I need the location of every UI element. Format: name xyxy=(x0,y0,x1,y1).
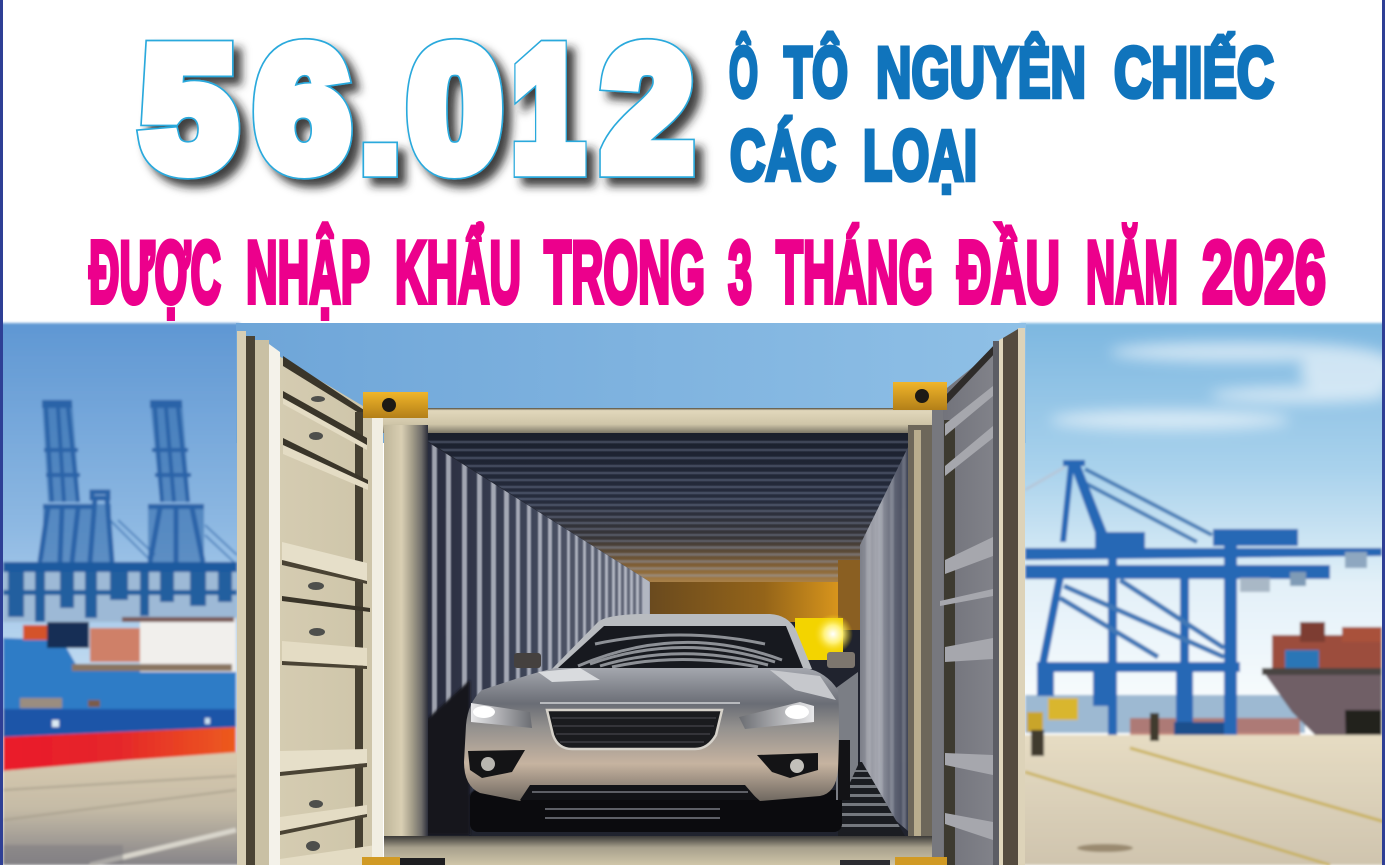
panel: container interior xyxy=(428,433,908,836)
heading: car type: TÔ xyxy=(784,33,848,113)
heading: imported in first 3 months of 2026: NHẬP xyxy=(246,222,370,322)
panel: left port background xyxy=(0,323,240,865)
light glow xyxy=(795,618,843,660)
heading: big number 56.012: 2 xyxy=(603,14,692,205)
icon: car xyxy=(464,614,858,832)
heading: imported in first 3 months of 2026: TRONG xyxy=(544,222,705,322)
right wall xyxy=(860,448,908,831)
heading: car type: CÁC xyxy=(730,117,836,196)
shadow left of car xyxy=(426,680,470,835)
sky between doors xyxy=(236,323,1026,443)
heading: big number 56.012: . xyxy=(365,69,396,192)
heading: imported in first 3 months of 2026: ĐẦU xyxy=(957,222,1060,322)
heading: big number 56.012: 2 xyxy=(603,14,692,205)
photo scene: container port xyxy=(0,323,1385,865)
heading: car type: NGUYÊN xyxy=(876,33,1086,113)
heading: car type xyxy=(729,33,1274,196)
heading: imported in first 3 months of 2026: ĐƯỢC xyxy=(89,222,221,322)
icon: dock worker xyxy=(1027,698,1159,756)
heading: big number 56.012 xyxy=(142,12,692,205)
heading: car type: CHIẾC xyxy=(1114,34,1274,113)
icon: corner castings xyxy=(362,382,947,865)
right ground xyxy=(1020,735,1385,865)
heading: car type: LOẠI xyxy=(863,117,977,196)
door ribs xyxy=(940,386,993,840)
heading: imported in first 3 months of 2026: NĂM xyxy=(1086,222,1178,322)
panel: left container door xyxy=(237,331,383,865)
heading: big number 56.012: 1 xyxy=(513,13,583,205)
heading: big number 56.012: . xyxy=(365,69,396,192)
car body xyxy=(464,668,839,801)
heading: big number 56.012: 1 xyxy=(513,13,583,205)
icon: left ship xyxy=(3,617,236,771)
icon: right gantry crane xyxy=(1025,460,1382,738)
heading: imported in first 3 months of 2026 xyxy=(89,222,1326,322)
panel: right container door xyxy=(932,328,1025,865)
car mirrors xyxy=(514,653,541,668)
icon: right cargo ship xyxy=(1262,622,1382,756)
heading: imported in first 3 months of 2026: 3 xyxy=(728,222,752,322)
far shore and containers xyxy=(1025,695,1305,733)
door ribs xyxy=(280,391,376,865)
car underside and tyres xyxy=(470,790,842,832)
left wall corrugation xyxy=(428,442,650,794)
heading: big number 56.012: 5 xyxy=(142,12,235,204)
floor xyxy=(838,762,908,838)
heading: big number 56.012: 6 xyxy=(256,12,349,204)
car headlights xyxy=(471,703,532,728)
heading: big number 56.012: 5 xyxy=(142,12,235,204)
heading: big number 56.012: 6 xyxy=(256,12,349,204)
heading: big number 56.012: 0 xyxy=(409,12,501,205)
heading: big number 56.012: 0 xyxy=(409,12,501,205)
ceiling corrugation xyxy=(415,433,915,583)
car grille xyxy=(547,710,722,749)
back wall xyxy=(650,582,840,622)
clouds xyxy=(1050,342,1385,430)
icon: left quay cranes xyxy=(3,400,237,572)
interior base xyxy=(400,430,932,840)
car lower vent xyxy=(520,785,758,800)
car fog lamps xyxy=(468,750,525,778)
panel: container frame xyxy=(383,408,935,865)
car roof and windshield xyxy=(552,614,812,669)
heading: car type: Ô xyxy=(729,33,758,113)
heading: imported in first 3 months of 2026: KHẨU xyxy=(395,222,521,322)
hood highlights xyxy=(538,668,600,682)
car right flank xyxy=(836,672,858,800)
deck machinery xyxy=(3,572,237,622)
panel: right port background xyxy=(1020,323,1385,865)
heading: imported in first 3 months of 2026: THÁNG xyxy=(776,222,933,322)
left ground xyxy=(3,752,240,865)
door lock handles xyxy=(306,396,325,851)
